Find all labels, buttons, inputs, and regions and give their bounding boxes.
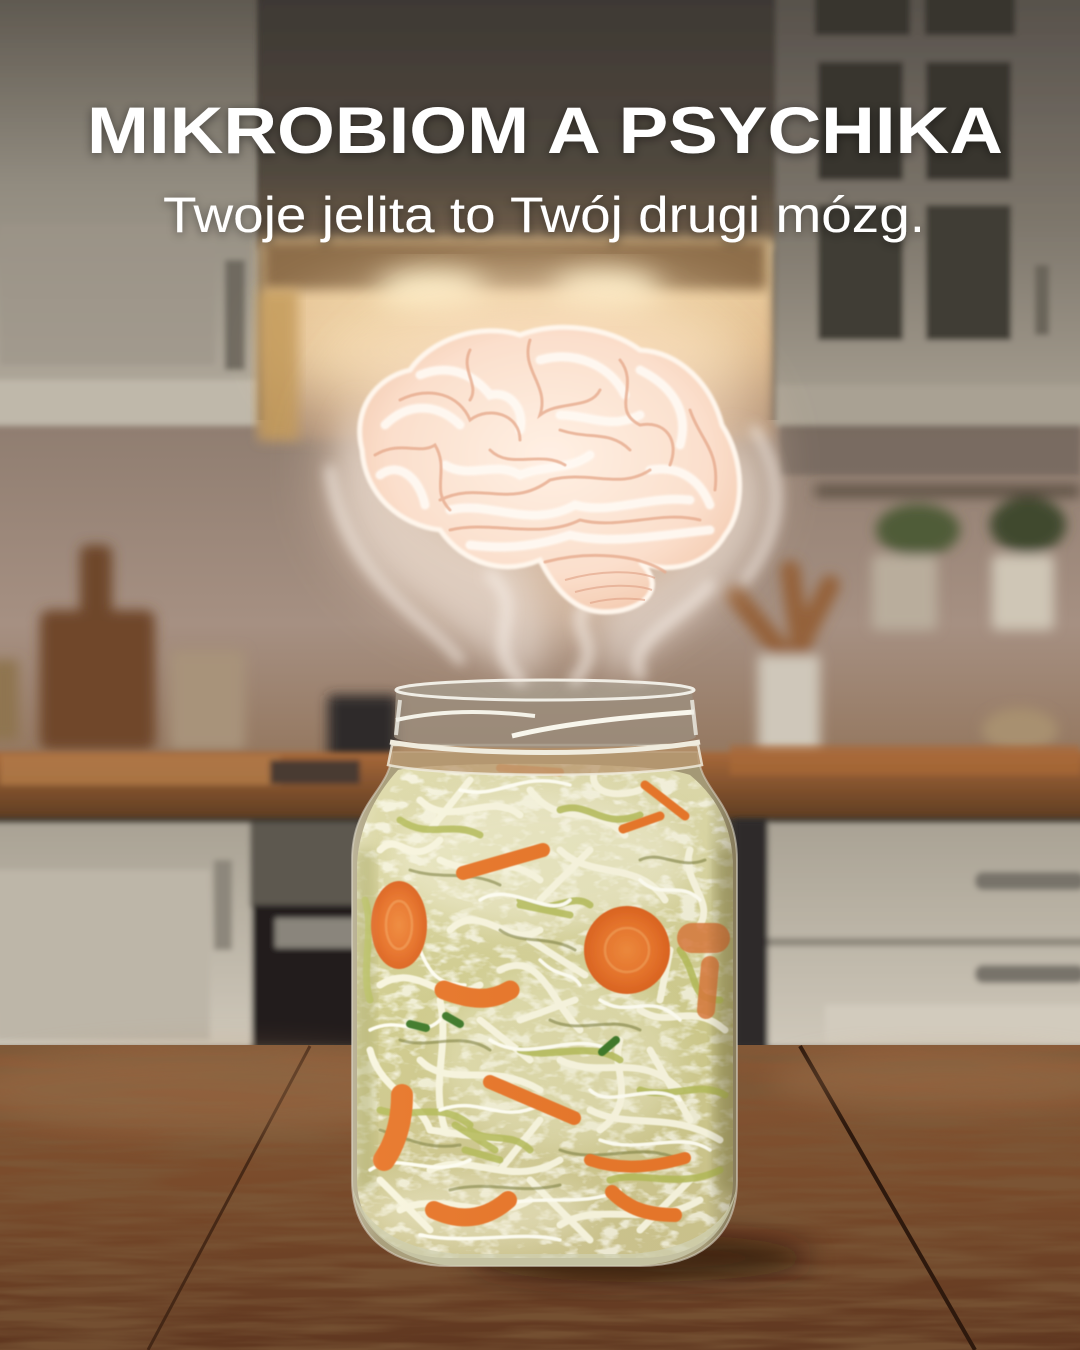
subtitle: Twoje jelita to Twój drugi mózg. bbox=[163, 187, 925, 243]
jar shadow bbox=[470, 1234, 810, 1282]
glass reflections bbox=[352, 752, 737, 1266]
jar body bbox=[352, 752, 737, 1266]
vapor trails bbox=[330, 430, 776, 680]
kitchen background bbox=[0, 0, 1080, 1048]
brain ridges bbox=[380, 357, 710, 547]
jar rim bbox=[390, 680, 700, 752]
backsplash wall bbox=[0, 420, 1080, 760]
carrot round center bbox=[584, 906, 670, 994]
jar of sauerkraut bbox=[350, 680, 740, 1270]
jar neck showing background bbox=[388, 745, 702, 775]
hood and glowing niche bbox=[258, 0, 780, 440]
carrot sticks bbox=[384, 768, 715, 1217]
plank seams bbox=[148, 1046, 310, 1350]
brain folds bbox=[375, 340, 716, 572]
icon: brain rising as vapor bbox=[330, 300, 776, 680]
carrot round left bbox=[371, 881, 427, 969]
brain silhouette bbox=[360, 327, 740, 612]
carrot pieces bbox=[371, 768, 715, 1217]
lower cabinets and oven bbox=[0, 820, 1080, 1048]
wood grain bbox=[0, 1045, 1080, 1350]
table light highlight bbox=[0, 1045, 480, 1135]
upper cabinets left bbox=[0, 0, 260, 426]
cabbage texture bbox=[350, 760, 740, 1270]
wooden table bbox=[0, 1045, 1080, 1350]
cabbage mass bbox=[357, 764, 733, 1258]
title: MIKROBIOM A PSYCHIKA bbox=[87, 93, 1003, 167]
green flecks bbox=[410, 1016, 616, 1052]
vapor cloud bbox=[337, 400, 766, 680]
brain glow bbox=[330, 300, 760, 640]
wooden counter bbox=[0, 745, 1080, 818]
upper cabinets right with glass bbox=[775, 0, 1080, 475]
bottom glass thickness bbox=[352, 1185, 737, 1266]
blurred shelf and kitchen objects bbox=[0, 485, 1080, 773]
cabbage shreds bbox=[365, 760, 725, 1240]
cerebellum stripes bbox=[565, 572, 655, 603]
